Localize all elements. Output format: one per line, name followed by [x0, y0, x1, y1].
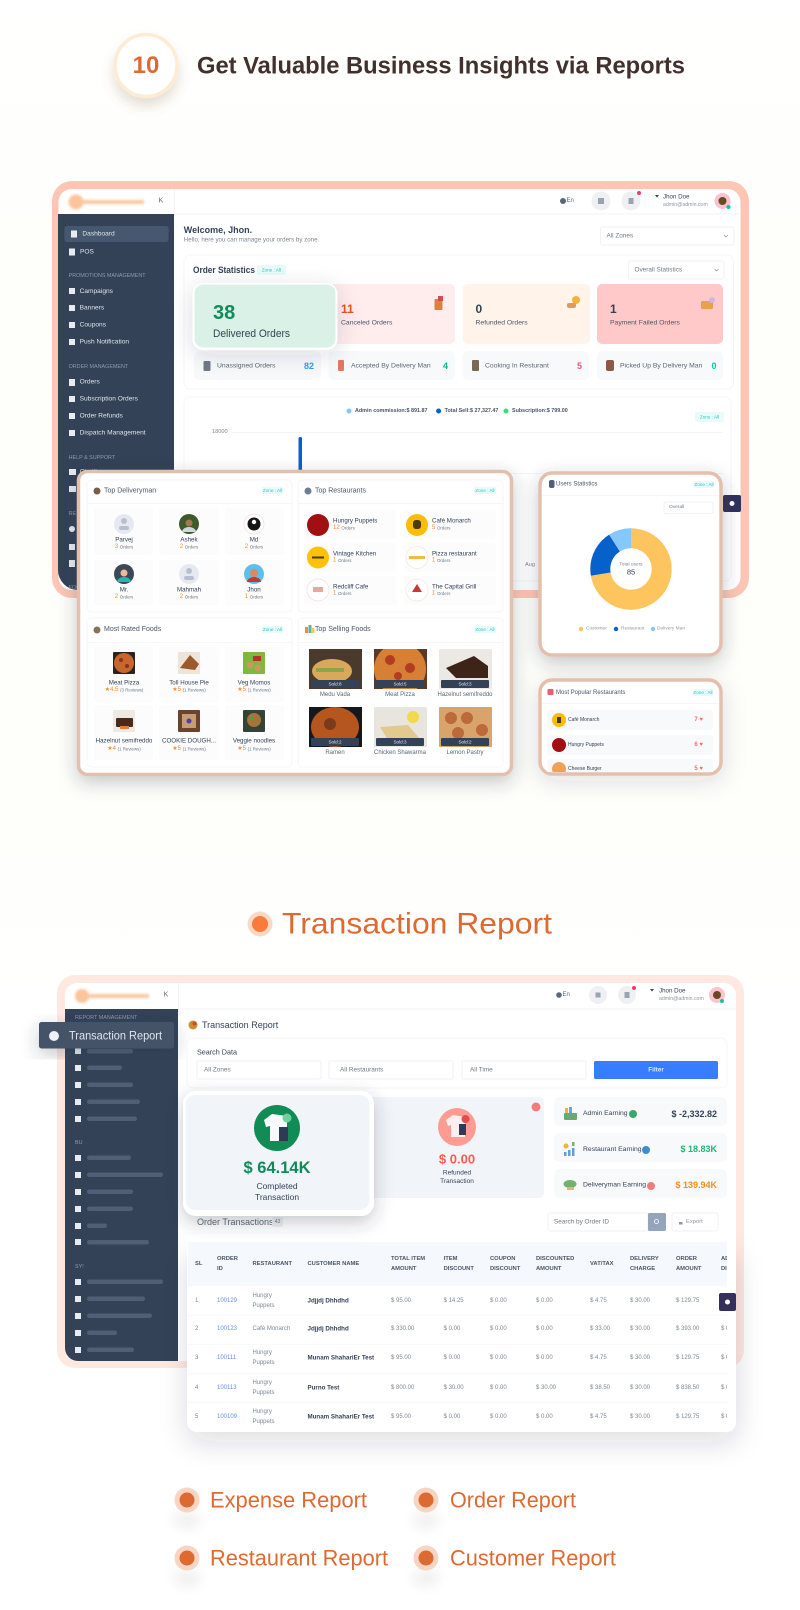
card: most rated foods [87, 618, 292, 767]
card: most rated foods: Veggie noodles [233, 738, 275, 744]
card: top restaurants [298, 480, 503, 612]
row 2: $ 330.00 [391, 1326, 415, 1332]
card: top selling foods: Sold:3 [458, 682, 472, 686]
card: completed transaction: $ 64.14K [244, 1159, 311, 1177]
card: top restaurants: The Capital Grill [432, 584, 476, 590]
card: top selling foods: Sold:5 [393, 682, 407, 686]
canceled orders card [320, 284, 455, 344]
row 3: $ 95.00 [391, 1355, 412, 1361]
card: top deliveryman: 1 Orders [245, 594, 264, 600]
panel: search data: Filter [648, 1066, 664, 1074]
top bar [178, 983, 736, 1009]
panel: users statistics: Total users [619, 562, 643, 568]
welcome text: Hello, here you can manage your orders by zone. [184, 236, 320, 244]
order status tiles: Accepted By Delivery Man [351, 362, 431, 370]
card: top restaurants: Redcliff Cafe [333, 584, 369, 590]
card: top restaurants: 5 Orders [432, 525, 451, 531]
card: top deliveryman [87, 480, 292, 612]
report bullet: order report: Order Report [450, 1488, 576, 1512]
card: most rated foods: Toll House Pie [169, 680, 209, 686]
panel: search data: All Zones [204, 1066, 231, 1074]
card: top selling foods: Meat Pizza [385, 692, 415, 698]
panel: most popular restaurants: 6 ♥ [694, 742, 703, 748]
order status tiles: Unassigned Orders [217, 362, 276, 370]
row 4: $ 800.00 [391, 1385, 415, 1391]
order status tiles: Picked Up By Delivery Man [620, 362, 703, 370]
card: restaurant earning [554, 1133, 727, 1162]
table: VAT/TAX [590, 1261, 614, 1267]
table: DISCOUNT [490, 1266, 521, 1272]
table: SL [195, 1261, 203, 1267]
panel: order transactions table [187, 1207, 752, 1432]
panel: search data [187, 1038, 727, 1088]
card: top restaurants: 12 Orders [333, 525, 356, 531]
row 4: $ 38.50 [590, 1385, 611, 1391]
report bullet: expense report: Expense Report [210, 1488, 367, 1512]
panel: chart: Aug [525, 562, 535, 568]
row 4: Hungry [252, 1380, 272, 1386]
page title: transaction report: Transaction Report [202, 1020, 279, 1030]
callout: delivered orders: 38 [213, 302, 235, 324]
panel: most popular restaurants: 7 ♥ [694, 717, 703, 723]
order status tiles [194, 351, 723, 380]
row 1: $ 14.25 [444, 1298, 464, 1304]
card: most rated foods: Zone : All [263, 627, 282, 632]
card: refunded transaction [438, 1102, 540, 1185]
table: COUPON [490, 1256, 515, 1262]
card: top deliveryman: 3 Orders [115, 544, 134, 550]
sidebar: Chattings [80, 468, 108, 476]
panel: chart: Subscription:$ 799.00 [512, 408, 568, 414]
order status tiles: 0 [711, 361, 716, 371]
refunded orders card [463, 284, 590, 344]
panel: users statistics: 85 [627, 568, 635, 576]
row 2: $ 0.00 [536, 1326, 553, 1332]
card: top restaurants: Zone : All [475, 488, 495, 493]
export button [672, 1213, 718, 1231]
donut chart [600, 538, 662, 600]
card: top restaurants: 1 Orders [333, 590, 352, 596]
card: top selling foods: Chicken Shawarma [374, 750, 427, 756]
card: top deliveryman: Parvej [115, 536, 133, 544]
sidebar: Banners [80, 304, 105, 312]
row 5: Puppets [252, 1419, 275, 1425]
settings button [719, 1293, 736, 1311]
panel: most popular restaurants: Cheese Burger [568, 766, 602, 772]
row 4: $ 838.50 [676, 1385, 700, 1391]
payment failed card [597, 284, 723, 344]
panel: order transactions table: Order Transactions [197, 1217, 274, 1227]
panel: chart: 18000 [212, 429, 228, 435]
row 4: 100113 [217, 1385, 237, 1391]
card: most rated foods: ★4 (1 Reviews) [107, 745, 141, 752]
row 5 [195, 1409, 738, 1425]
row 5: Munam ShahariEr Test [308, 1414, 374, 1420]
card: top restaurants: 1 Orders [333, 558, 352, 564]
row 2: $ 30.00 [630, 1326, 651, 1332]
row 1: $ 0.00 [536, 1298, 553, 1304]
table: CUSTOMER NAME [308, 1261, 359, 1267]
row 3: Hungry [252, 1350, 272, 1356]
panel: search data: All Time [470, 1066, 493, 1074]
card: top selling foods: Zone : All [475, 627, 495, 632]
card: deliveryman earning [554, 1169, 727, 1198]
sidebar: K [159, 198, 164, 204]
step number badge [115, 34, 177, 96]
card: most rated foods: ★5 (1 Reviews) [172, 745, 206, 752]
top bar: Jhon Doe [663, 194, 690, 200]
row 3: $ 0.00 [721, 1355, 738, 1361]
report bullet: customer report: Customer Report [450, 1546, 616, 1570]
sidebar: Coupons [80, 322, 107, 328]
panel: most popular restaurants: Zone : All [693, 690, 713, 695]
table: ID [217, 1266, 223, 1272]
refunded orders card: 0 [476, 302, 482, 316]
row 2: $ 33.00 [590, 1326, 611, 1332]
row 2: Jdjjdj Dhhdhd [308, 1326, 349, 1332]
card: top deliveryman: Mahmah [177, 586, 202, 594]
card: completed transaction [183, 1091, 374, 1216]
row 1: Jdjjdj Dhhdhd [308, 1298, 349, 1304]
panel: users statistics: Restaurant [621, 626, 645, 632]
sidebar: FOO [69, 585, 80, 591]
order status tiles: 82 [304, 361, 314, 371]
card: top deliveryman: Md [250, 536, 259, 544]
row 3: $ 0.00 [444, 1355, 461, 1361]
panel: users statistics: Users Statistics [556, 482, 597, 488]
table: TOTAL ITEM [391, 1256, 425, 1262]
card: most rated foods: ★4.5 (3 Reviews) [105, 686, 144, 693]
panel: transaction screenshot frame: K [164, 992, 169, 998]
row 1 [195, 1293, 700, 1309]
row 1: $ 95.00 [391, 1298, 412, 1304]
card: refunded transaction: $ 0.00 [439, 1152, 475, 1166]
panel: most popular restaurants [540, 680, 721, 779]
row 5: $ 30.00 [630, 1414, 651, 1420]
panel: search data: Search Data [197, 1048, 237, 1056]
panel: chart: Admin commission:$ 891.87 [355, 408, 428, 414]
card: top deliveryman: Jhon [247, 586, 261, 594]
title: Get Valuable Business Insights via Reports [197, 52, 685, 80]
card: deliveryman earning: Deliveryman Earning [583, 1182, 646, 1188]
row 1: 100129 [217, 1298, 238, 1304]
refunded orders card: Refunded Orders [476, 320, 528, 326]
row 1: Hungry [252, 1293, 272, 1299]
card: top restaurants: 1 Orders [432, 558, 451, 564]
card: most rated foods: ★5 (1 Reviews) [237, 686, 271, 693]
card: most rated foods: Most Rated Foods [104, 626, 162, 633]
callout: delivered orders: Delivered Orders [213, 328, 290, 340]
panel: order statistics: Overall Statistics [634, 266, 682, 274]
card: most rated foods: ★5 (1 Reviews) [237, 745, 271, 752]
row 2 [195, 1326, 738, 1332]
panel: most popular restaurants: Most Popular Restaurants [556, 690, 625, 696]
panel: users statistics: Customer [586, 626, 607, 632]
row 2: $ 0.00 [490, 1326, 507, 1332]
row 4: Purno Test [308, 1384, 339, 1392]
card: top selling foods: Sold:2 [458, 740, 472, 744]
card: top deliveryman: Zone : All [263, 488, 282, 493]
canceled orders card: Canceled Orders [341, 320, 393, 326]
top bar: admin@admin.com [663, 202, 708, 208]
row 3: Munam ShahariEr Test [308, 1354, 374, 1362]
card: most rated foods: COOKIE DOUGH... [162, 738, 216, 744]
panel: users statistics: Overall [669, 504, 684, 510]
row 5: $ 95.00 [391, 1414, 412, 1420]
row 5: $ 0.00 [490, 1414, 507, 1420]
card: top selling foods [298, 618, 503, 767]
card: admin earning: Admin Earning [583, 1110, 628, 1117]
row 5: $ 0.00 [721, 1414, 738, 1420]
row 3: Puppets [252, 1360, 275, 1366]
row 4: $ 30.00 [536, 1385, 557, 1391]
table: ADMIN [721, 1256, 740, 1262]
table: DELIVERY [630, 1256, 659, 1262]
sidebar: Dispatch Management [80, 430, 146, 436]
panel: search data: All Restaurants [340, 1066, 383, 1074]
card: deliveryman earning: $ 139.94K [675, 1180, 717, 1190]
row 1: 1 [195, 1298, 199, 1304]
sidebar: POS [80, 248, 95, 256]
top bar: En [566, 198, 574, 204]
row 2: 100123 [217, 1326, 238, 1332]
top bar: En [562, 992, 570, 998]
card: top selling foods: Lemon Pastry [446, 750, 484, 756]
step number badge: 10 [133, 52, 159, 79]
card: top restaurants: Vintage Kitchen [333, 550, 377, 558]
sidebar [58, 194, 174, 591]
panel: users statistics: Zone : All [694, 482, 714, 487]
logo [68, 194, 144, 210]
card: restaurant earning: $ 18.83K [680, 1144, 717, 1154]
panel: order statistics [184, 255, 734, 389]
search box [548, 1213, 666, 1231]
card: top deliveryman: Top Deliveryman [104, 488, 156, 494]
card: refunded transaction: Refunded [443, 1170, 471, 1176]
row 4: $ 0.00 [490, 1385, 507, 1391]
sidebar: Campaigns [80, 288, 114, 295]
card: top restaurants: 1 Orders [432, 590, 451, 596]
panel: users statistics [540, 473, 721, 655]
sidebar: Push Notification [80, 338, 129, 346]
top bar: admin@admin.com [659, 996, 704, 1002]
table: ORDER [217, 1256, 239, 1262]
callout: delivered orders [192, 283, 338, 350]
row 2: $ 0.00 [444, 1326, 461, 1332]
card: top restaurants: Hungry Puppets [333, 518, 377, 524]
card: top restaurants: Café Monarch [432, 518, 471, 524]
callout: sidebar transaction report [39, 1022, 174, 1048]
sidebar [65, 1009, 178, 1361]
row 3: 100111 [217, 1355, 237, 1361]
panel: transaction stats background [187, 1097, 544, 1198]
card: top restaurants: Pizza restaurant [432, 550, 477, 558]
panel: top lists popup [78, 472, 512, 774]
settings button [723, 495, 741, 512]
row 3: $ 0.00 [490, 1355, 507, 1361]
panel: chart [184, 397, 731, 581]
row 3 [195, 1350, 738, 1366]
zone select [600, 227, 734, 245]
order status tiles: 5 [577, 361, 582, 371]
card: top selling foods: Sold:3 [393, 740, 407, 744]
panel: order transactions table: 43 [275, 1219, 280, 1225]
row 4: Puppets [252, 1390, 275, 1396]
panel: transaction screenshot frame [57, 975, 744, 1368]
report bullet: restaurant report: Restaurant Report [210, 1546, 388, 1570]
card: top deliveryman: Ashek [180, 536, 199, 544]
order status tiles: Cooking In Resturant [485, 362, 549, 370]
row 5: 5 [195, 1414, 199, 1420]
card: top deliveryman: 2 Orders [180, 544, 199, 550]
row 5: 100109 [217, 1414, 238, 1420]
card: admin earning: $ -2,332.82 [671, 1109, 717, 1119]
card: top deliveryman: 2 Orders [180, 594, 199, 600]
panel: most popular restaurants: Café Monarch [568, 717, 600, 723]
sidebar: Dashboard [82, 230, 115, 238]
row 4 [195, 1380, 738, 1396]
row 5: $ 129.75 [676, 1414, 700, 1420]
row 3: $ 129.75 [676, 1355, 700, 1361]
row 1: Puppets [252, 1303, 275, 1309]
sidebar: BU [75, 1140, 83, 1146]
sidebar: REPORT MANAGEMENT [75, 1015, 138, 1021]
welcome text [184, 225, 320, 244]
row 2: $ 393.00 [676, 1326, 700, 1332]
table: RESTAURANT [252, 1261, 292, 1267]
payment failed card: Payment Failed Orders [610, 320, 680, 326]
card: top deliveryman: Mr. [120, 586, 129, 594]
card: completed transaction: Completed [256, 1181, 298, 1191]
row 1: $ 30.00 [630, 1298, 651, 1304]
card: top selling foods: Medu Vada [320, 692, 351, 698]
card: completed transaction: Transaction [255, 1192, 299, 1202]
panel: chart: Total Sell:$ 27,327.47 [445, 408, 498, 414]
row 3: $ 0.00 [536, 1355, 553, 1361]
row 5: $ 0.00 [444, 1414, 461, 1420]
sidebar: Subscription Orders [80, 396, 139, 402]
row 2: 2 [195, 1326, 199, 1332]
panel: chart: 12000 [212, 470, 228, 476]
card: admin earning [554, 1097, 727, 1126]
panel: most popular restaurants: Hungry Puppets [568, 742, 604, 748]
welcome text: Welcome, Jhon. [184, 225, 252, 235]
table: AMOUNT [391, 1266, 417, 1272]
row 3: 3 [195, 1355, 199, 1361]
sidebar: SY! [75, 1264, 84, 1270]
panel: order statistics: Zone : All [262, 268, 281, 272]
panel: dashboard screenshot [52, 181, 749, 598]
panel: users statistics: Delivery Man [657, 626, 685, 632]
card: restaurant earning: Restaurant Earning [583, 1146, 642, 1153]
sidebar: PROMOTIONS MANAGEMENT [69, 273, 146, 279]
card: top selling foods: Top Selling Foods [315, 626, 371, 633]
row 2: Café Monarch [252, 1326, 290, 1332]
order status tiles: 4 [443, 361, 448, 371]
table: DISCOUNTED [536, 1256, 574, 1262]
row 5: Hungry [252, 1409, 272, 1415]
card: most rated foods: Veg Momos [238, 680, 270, 686]
table: AMOUNT [676, 1266, 702, 1272]
table: CHARGE [630, 1266, 655, 1272]
card: most rated foods: Hazelnut semifreddo [96, 738, 153, 744]
table: DISCOUNT [444, 1266, 474, 1272]
sidebar: HELP & SUPPORT [69, 455, 116, 461]
sidebar: RES [69, 511, 80, 517]
table: AMOUNT [536, 1266, 562, 1272]
section heading: transaction report: Transaction Report [282, 908, 553, 940]
row 4: 4 [195, 1385, 199, 1391]
row 4: $ 30.00 [630, 1385, 651, 1391]
row 3: $ 30.00 [630, 1355, 651, 1361]
card: top selling foods: Hazelnut semifreddo [437, 692, 493, 698]
card: top selling foods: Sold:8 [328, 682, 342, 686]
panel: most popular restaurants: 5 ♥ [694, 766, 703, 772]
table: ITEM [444, 1256, 458, 1262]
zone select: All Zones [606, 232, 633, 240]
card: top restaurants: Top Restaurants [315, 488, 366, 494]
card: top selling foods: Sold:2 [328, 740, 342, 744]
table: ORDER [676, 1256, 698, 1262]
card: most rated foods: Meat Pizza [109, 680, 140, 686]
card: top selling foods: Ramen [325, 750, 345, 756]
row 3: $ 4.75 [590, 1355, 607, 1361]
row 2: $ 0.00 [721, 1326, 738, 1332]
logo [75, 989, 149, 1003]
panel: order statistics: Order Statistics [193, 265, 255, 275]
row 1: $ 4.75 [590, 1298, 607, 1304]
row 1: $ 0.00 [490, 1298, 507, 1304]
table [188, 1242, 752, 1425]
card: top deliveryman: 2 Orders [115, 594, 134, 600]
search box: Search by Order ID [554, 1218, 609, 1226]
row 1: $ 129.75 [676, 1298, 700, 1304]
card: top deliveryman: 2 Orders [245, 544, 264, 550]
sidebar: Order Refunds [80, 412, 124, 420]
canceled orders card: 11 [341, 302, 354, 316]
callout: sidebar transaction report: Transaction Report [69, 1028, 163, 1042]
sidebar: ORDER MANAGEMENT [69, 364, 129, 370]
row 4: $ 30.00 [444, 1385, 464, 1391]
export button: Export [686, 1219, 703, 1225]
panel: chart: Zone : All [700, 414, 719, 420]
card: refunded transaction: Transaction [440, 1178, 474, 1185]
sidebar: Orders [80, 378, 100, 386]
payment failed card: 1 [610, 302, 617, 316]
table: DISCOUNT [721, 1266, 752, 1272]
top bar: Jhon Doe [659, 988, 686, 994]
top bar [174, 189, 740, 214]
card: most rated foods: ★5 (1 Reviews) [172, 686, 206, 693]
row 5: $ 0.00 [536, 1414, 553, 1420]
row 5: $ 4.75 [590, 1414, 607, 1420]
row 4: $ 0.00 [721, 1385, 738, 1391]
